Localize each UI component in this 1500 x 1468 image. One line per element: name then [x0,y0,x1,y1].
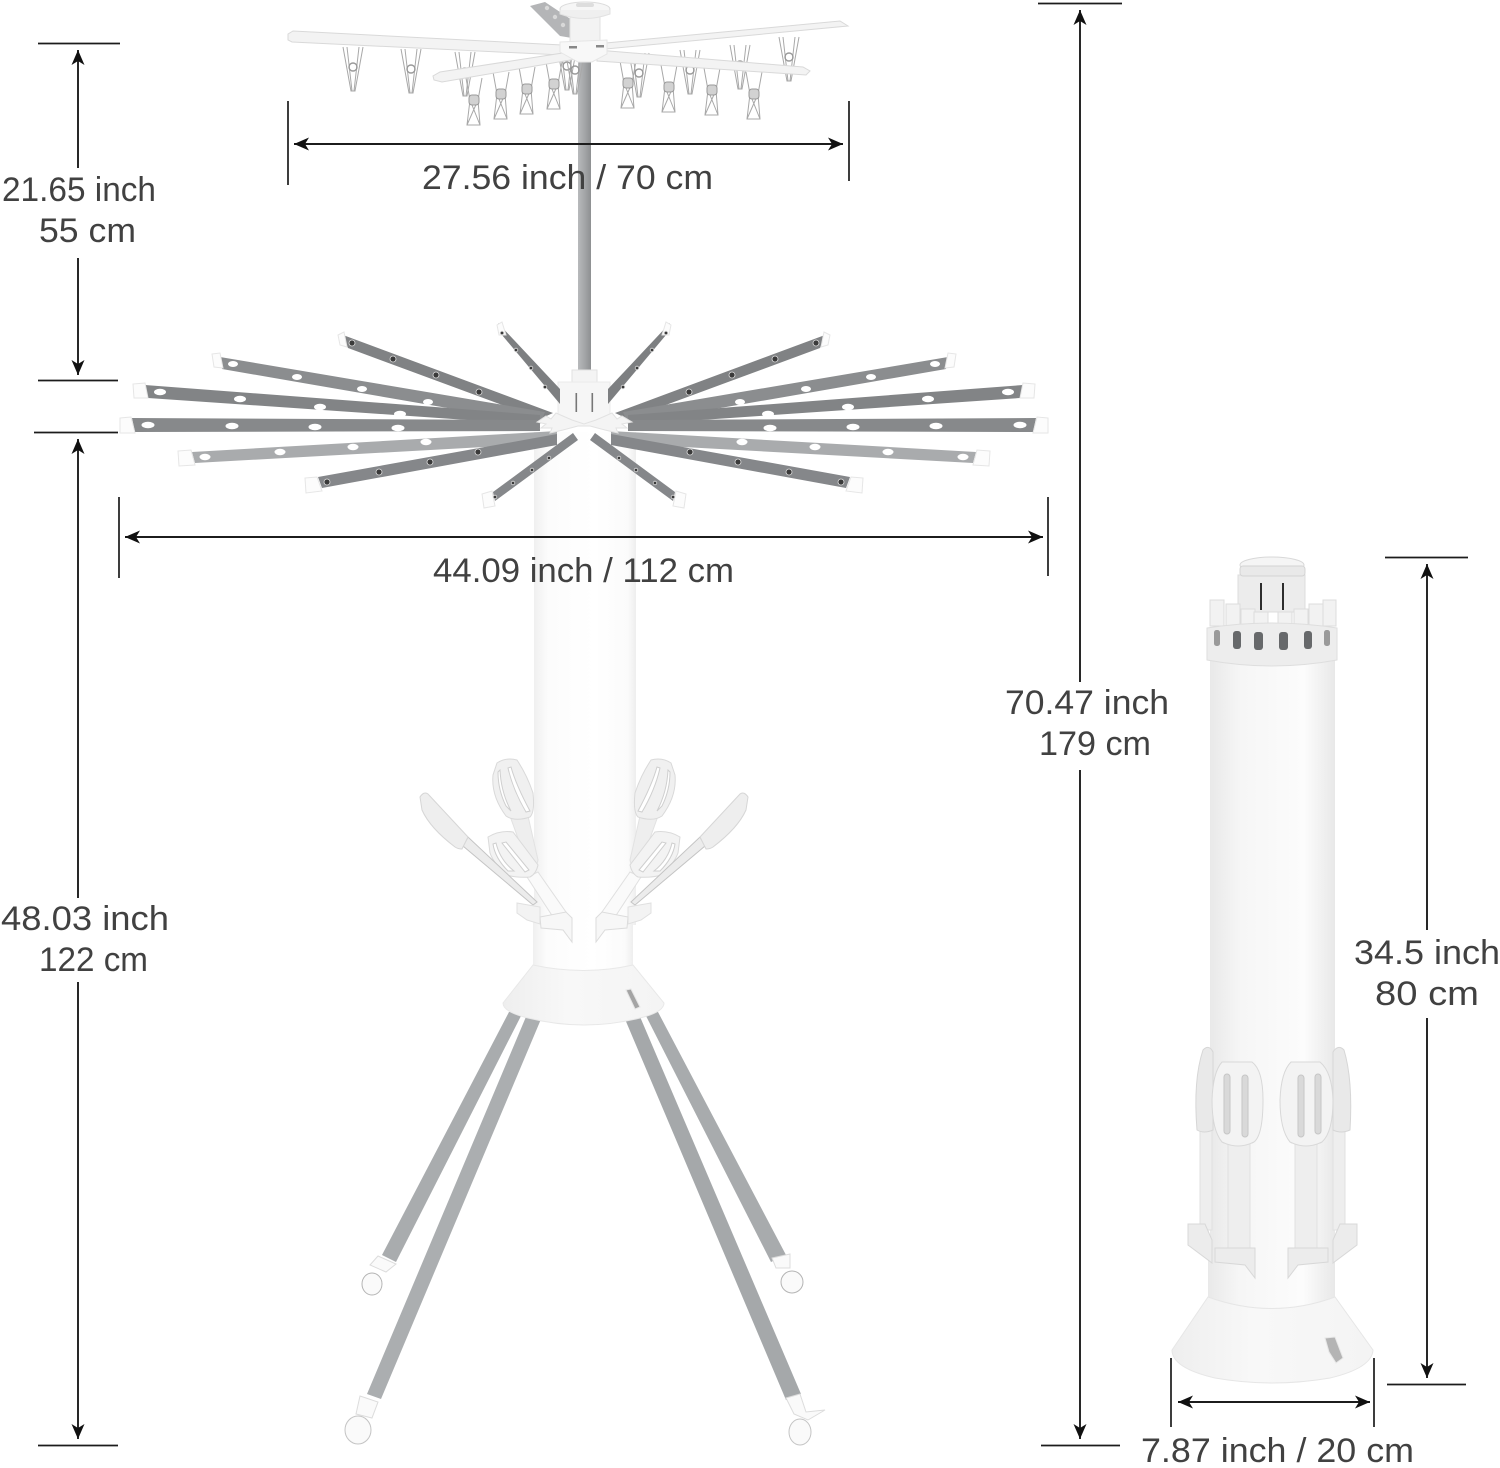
dimension: 44.09 inch width: 44.09 inch / 112 cm [433,552,734,590]
dimension: 21.65 inch height [2,44,156,380]
top rack [288,2,848,125]
top hub [560,2,610,62]
folded drying rack [1172,557,1373,1383]
rear gray arm [530,2,572,38]
dimension: 34.5 inch height [1354,558,1500,1384]
dimension: 70.47 inch height: 70.47 inch [1005,684,1169,722]
dimension: 27.56 inch width [288,101,849,197]
folded base latch [1325,1337,1343,1363]
casters [345,1254,825,1445]
dimension: 70.47 inch height: 179 cm [1039,725,1151,763]
hub teeth [537,413,632,433]
folded body [1210,660,1335,1260]
front clips [466,61,762,125]
rear paddles and side blades right [596,759,748,942]
folded base cone [1172,1297,1373,1383]
side paddles [1196,1047,1351,1132]
rear paddles and side blades left [420,759,572,942]
base slot [626,989,640,1009]
four white arms [288,21,848,82]
rear clips [343,37,799,97]
dimension: 7.87 inch width [1141,1358,1414,1468]
base cone [503,965,664,1025]
full size drying rack [120,2,1048,1445]
lower arms right [590,322,1048,508]
dimension: 44.09 inch width [119,497,1048,590]
lower hub [558,370,610,424]
dimension: 48.03 inch height: 122 cm [39,941,148,979]
dimension: 27.56 inch width: 27.56 inch / 70 cm [422,159,713,197]
dimension: 21.65 inch height: 55 cm [39,212,136,250]
dimension: 70.47 inch height [1005,4,1169,1446]
dimension: 48.03 inch height: 48.03 inch [1,900,169,938]
front paddles [1212,1062,1333,1146]
dimension: 34.5 inch height: 34.5 inch [1354,934,1500,972]
base collar [533,917,633,970]
dimension: 48.03 inch height [1,432,169,1446]
tripod legs [367,1012,801,1400]
folded top neck [1238,557,1305,612]
dimension: 34.5 inch height: 80 cm [1375,975,1479,1013]
paddle slots [1224,1074,1321,1137]
folded brackets [1188,1224,1357,1278]
crown teeth [1210,600,1336,638]
crown slots [1214,630,1330,650]
side stems [1200,1125,1345,1250]
central column [534,432,636,925]
dimension: 21.65 inch height: 21.65 inch [2,171,156,209]
centre pole [578,55,591,385]
crown ring [1207,623,1337,666]
folded collar [1208,1250,1335,1311]
lower arms left [120,322,578,508]
